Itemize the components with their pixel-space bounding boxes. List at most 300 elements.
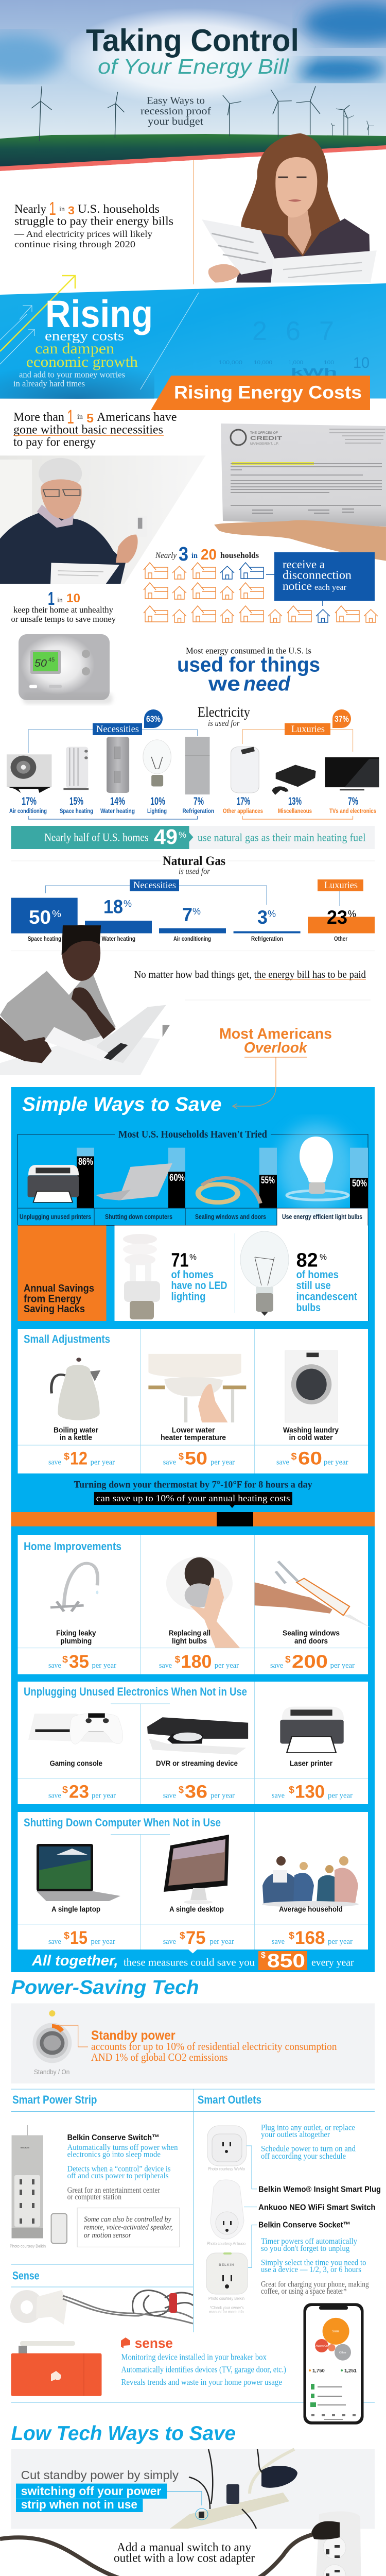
bar: windows 55 percent (259, 1148, 277, 1208)
annual savings box (17, 1226, 106, 1321)
chart: natural gas use (11, 853, 375, 951)
savings: 23, 36, 130: $ (289, 1785, 294, 1795)
meter readout: 100,000 (219, 360, 242, 366)
rising arrows (0, 276, 199, 389)
photo: woman reading bills (202, 133, 377, 282)
photo: older man at thermostat (0, 455, 205, 584)
stat: 82 percent (296, 1250, 357, 1314)
savings: 23, 36, 130: per year (210, 1792, 235, 1800)
savings: 35, 180, 200: per year (330, 1662, 355, 1670)
chart title: Most U.S. Households Haven't Tried (118, 1129, 267, 1140)
stat: 71 percent: lighting (171, 1291, 206, 1303)
callout: 49 percent natural gas: use natural gas as their main heating fuel (198, 832, 366, 844)
disconnection notice box: each year (314, 583, 347, 592)
air conditioning bar (159, 904, 226, 942)
title: Taking Control (86, 23, 299, 58)
Conserve Socket features: Great for charging your phone, making (261, 2280, 369, 2289)
heading: Simple Ways to Save (22, 1094, 222, 1115)
intro statistic: 1 in 3 households: — And electricity prices will likely (14, 229, 152, 239)
refrigeration bar: % (268, 909, 276, 919)
statistic: 1 in 5 Americans (13, 406, 177, 449)
savings: 12, 50, 60 (48, 1449, 348, 1469)
rising costs text: and add to your money worries (19, 370, 125, 380)
device: Belkin socket: BELKIN (219, 2263, 234, 2267)
panel: Sense monitor (10, 2269, 363, 2425)
salmon diagonal strip (0, 145, 386, 171)
panel: manual switch adapters (0, 2512, 361, 2576)
panel: shutting down computer (17, 1812, 368, 1950)
product copy: Automatically turns off power when (67, 2143, 178, 2152)
collection letter: THE OFFICES OF (250, 431, 278, 435)
intro statistic: 1 in 3 households: Nearly (14, 202, 46, 215)
Sense logo and copy: Monitoring device installed in your breaker box (121, 2352, 267, 2362)
labels for tried actions: Sealing windows and doors (195, 1213, 266, 1221)
LED and incandescent stats box (114, 1226, 368, 1321)
disconnection notice box: notice (283, 580, 312, 592)
intro statistic: 1 in 3 households: continue rising through 2020 (14, 239, 135, 249)
electricity heading (198, 704, 250, 728)
labels: in a kettle (60, 1434, 92, 1442)
heading: used for things we need: used for things (177, 654, 320, 676)
statistic: 1 in 5 Americans: in (77, 413, 83, 421)
savings: 23, 36, 130: save (272, 1792, 285, 1800)
space heating bar: Space heating (28, 935, 61, 942)
bar: windows 55 percent: 55% (261, 1175, 275, 1186)
electricity percentages: 14% (110, 795, 125, 807)
panel: home improvements: Home Improvements (24, 1540, 121, 1553)
nearly 3 in 20 heading: 3 (179, 544, 188, 565)
note box (77, 2208, 180, 2247)
heading: Rising: Rising (45, 293, 153, 335)
heading: used for things we need (177, 646, 320, 696)
stat: 71 percent: of homes (171, 1269, 214, 1281)
device: Belkin socket: *Check your owner's (210, 2306, 244, 2310)
necessities label (93, 709, 163, 735)
collection letter: MANAGEMENT, L.P. (250, 443, 279, 446)
icon: thermostat (19, 634, 113, 704)
photo credit: Photo courtesy Belkin (10, 2244, 46, 2249)
standby text: AND 1% of global CO2 emissions (91, 2051, 228, 2063)
product copy: Great for an entertainment center (67, 2186, 161, 2195)
Sense logo and copy: sense (135, 2335, 173, 2351)
savings: 15, 75, 168: $ (180, 1930, 185, 1941)
savings: 12, 50, 60: $ (64, 1451, 69, 1462)
savings: 23, 36, 130 (48, 1782, 353, 1802)
phone with Sense app: Solar (332, 2330, 339, 2333)
meter readout: 2 (252, 316, 267, 346)
clouds and deep sky (0, 3, 386, 106)
electricity percentages: 7% (348, 795, 358, 807)
labels: Gaming console (50, 1759, 102, 1768)
luxuries tag (318, 879, 363, 891)
intro statistic: 1 in 3 households (14, 198, 173, 249)
air conditioning bar: % (192, 906, 201, 917)
appliance illustrations (7, 737, 379, 795)
standby text: accounts for up to 10% of residential electricity consumption (91, 2040, 337, 2053)
air conditioning bar: Air conditioning (173, 935, 211, 942)
savings: 12, 50, 60: per year (210, 1459, 235, 1467)
savings: 12, 50, 60: save (276, 1459, 289, 1467)
orange banner (151, 376, 370, 410)
heading: power-saving tech: Power-Saving Tech (11, 1977, 199, 1998)
labels: Fixing leaky (56, 1629, 96, 1637)
bar: printers 86 percent (77, 1148, 94, 1208)
hand (214, 520, 386, 561)
electricity percentages: 13% (288, 795, 302, 807)
device: WeMo outlet: Photo courtesy WeMo (208, 2166, 245, 2171)
meter readout: 100 (324, 360, 334, 366)
savings: 35, 180, 200: save (159, 1662, 172, 1670)
icon: spiral bulb (123, 1234, 160, 1319)
savings: 15, 75, 168: $ (289, 1930, 294, 1941)
air conditioning bar: 7 (182, 904, 192, 925)
statistic: 1 in 10: 10 (66, 591, 80, 605)
photo: Sense device (11, 2341, 102, 2396)
stat: 82 percent: bulbs (296, 1302, 321, 1314)
dark corner (0, 355, 154, 399)
labels (56, 1629, 340, 1646)
necessities tag: Necessities (133, 880, 176, 891)
product copy: off and cuts power to peripherals (67, 2172, 169, 2180)
heading: low tech ways to save: Low Tech Ways to Save (11, 2422, 236, 2445)
labels (51, 1906, 343, 1914)
panel: small adjustments: Small Adjustments (24, 1332, 110, 1346)
refrigeration bar: Refrigeration (251, 935, 283, 942)
savings: 15, 75, 168: save (272, 1938, 285, 1946)
phone with Sense app: Always On (315, 2345, 328, 2348)
rising costs text (13, 329, 138, 388)
electricity labels: Air conditioning (9, 807, 47, 815)
heading: most Americans overlook (185, 1000, 371, 1057)
product names (258, 2185, 381, 2230)
icon: washing machine (285, 1351, 338, 1422)
tech grid lines (11, 2089, 375, 2402)
WeMo features: your outlets altogether (261, 2130, 330, 2139)
icon: laptop (96, 1163, 172, 1200)
bar: computers 60 percent (168, 1148, 185, 1208)
annual savings box: from Energy (24, 1293, 82, 1304)
refrigeration bar (234, 907, 301, 942)
frame lines (17, 1134, 368, 1321)
savings: 35, 180, 200: $ (62, 1654, 68, 1665)
meter readout (219, 316, 370, 378)
statistic: 1 in 5 Americans: 5 (86, 412, 94, 426)
savings: 35, 180, 200: save (270, 1662, 283, 1670)
stat: 82 percent: still use (296, 1280, 331, 1292)
icon: incandescent bulb (240, 1231, 289, 1316)
icon: weather strip roll (198, 1178, 260, 1204)
panel: smart outlets (198, 2093, 381, 2314)
statistic: 1 in 10 (11, 588, 116, 624)
heading: most Americans overlook: Overlook (244, 1040, 308, 1056)
electricity labels: TVs and electronics (329, 807, 376, 815)
bar: bulbs 50 percent (350, 1148, 368, 1208)
device: WeMo outlet (207, 2126, 246, 2171)
text: add a manual switch (114, 2541, 255, 2565)
bar: bulbs 50 percent: 50% (352, 1178, 367, 1189)
statistic: 1 in 5 Americans: 1 (67, 406, 74, 428)
rising costs text: can dampen (35, 340, 114, 357)
savings: 15, 75, 168: save (163, 1938, 176, 1946)
water heating bar: % (124, 899, 132, 909)
WeMo features: off according your schedule (261, 2152, 346, 2161)
icon: caulking gun (255, 1562, 371, 1628)
highlighted text: switching off your power (21, 2484, 161, 2498)
savings: 15, 75, 168: per year (210, 1938, 234, 1946)
statistic: 1 in 10: or unsafe temps to save money (11, 614, 116, 624)
photo: Belkin power strip: BELKIN (21, 2146, 29, 2149)
savings: 15, 75, 168: 75 (186, 1928, 206, 1948)
rising costs text: in already hard times (13, 379, 85, 388)
Sense logo and copy: Reveals trends and waste in your home power usage (121, 2377, 282, 2387)
Sense logo and copy: Automatically identifies devices (TV, garage door, etc.) (121, 2365, 286, 2375)
labels: Replacing all (169, 1629, 210, 1637)
tagline: recession proof (141, 106, 211, 117)
nearly 3 in 20 heading: in (191, 552, 198, 560)
space heating bar: % (52, 909, 61, 919)
labels: plumbing (60, 1637, 92, 1646)
standby text (91, 2028, 337, 2063)
note box: or motion sensor (84, 2231, 131, 2240)
labels for tried actions: Shutting down computers (105, 1213, 172, 1221)
natural gas heading (11, 853, 375, 876)
intro statistic: 1 in 3 households: struggle to pay their energy bills (14, 214, 173, 228)
meter readout: 6 (286, 316, 301, 346)
statistic: 1 in 5 Americans: More than (13, 411, 64, 424)
bar: printers 86 percent: 86% (78, 1157, 93, 1167)
Conserve Socket features: Timer powers off automatically (261, 2237, 357, 2246)
savings: 15, 75, 168: $ (64, 1930, 69, 1941)
panel: shutting down computer: Shutting Down Computer When Not in Use (24, 1816, 221, 1829)
nearly 3 in 20 heading: households (220, 551, 259, 560)
highlighted text (16, 2484, 167, 2512)
intro statistic: 1 in 3 households: in (59, 206, 65, 213)
savings: 12, 50, 60: $ (291, 1451, 296, 1462)
wind turbines (31, 86, 374, 141)
panel: standby power (11, 2003, 375, 2083)
chart: most households have not tried (17, 1123, 368, 1321)
meter readout: 10,000 (254, 360, 272, 366)
icon: laptop (37, 1844, 120, 1901)
savings: 12, 50, 60: $ (179, 1451, 184, 1462)
icon: leaky faucet (50, 1563, 98, 1612)
electricity percentages: 10% (150, 795, 165, 807)
heading: used for things we need: need (243, 673, 291, 696)
product copy: Belkin Conserve Switch™ (67, 2133, 160, 2142)
photo: current clamp sensors (10, 2290, 193, 2325)
Sense logo and copy (121, 2335, 286, 2387)
subtitle: of Your Energy Bill (98, 55, 290, 78)
total savings line (31, 1950, 354, 1972)
labels: Laser printer (290, 1759, 332, 1768)
total savings line: All together, (31, 1953, 118, 1969)
disconnection notice box: disconnection (283, 569, 352, 582)
highlighted text: strip when not in use (21, 2498, 137, 2511)
electricity labels (9, 807, 376, 815)
savings: 35, 180, 200: 35 (69, 1652, 89, 1672)
water heating bar: Water heating (102, 935, 135, 942)
phone with Sense app (304, 2303, 363, 2425)
electricity percentages: 15% (69, 795, 83, 807)
savings: 35, 180, 200: 200 (292, 1652, 328, 1672)
stat: 82 percent: % (320, 1253, 327, 1262)
total savings line: $ (261, 1951, 266, 1960)
Conserve Socket features: Simply select the time you need to (261, 2259, 366, 2267)
product names: Belkin Conserve Socket™ (258, 2221, 350, 2230)
meter readout: kWh (291, 367, 337, 378)
photo: collection letter held on a hand (214, 423, 386, 561)
stat: 71 percent: 71 (171, 1250, 188, 1272)
savings: 15, 75, 168: 15 (70, 1928, 87, 1948)
total savings line: these measures could save you (124, 1956, 255, 1969)
labels for tried actions: Unplugging unused printers (20, 1213, 91, 1221)
phone with Sense app: Other (339, 2351, 346, 2354)
savings: 15, 75, 168: save (48, 1938, 61, 1946)
blue panel background (11, 1087, 375, 1972)
electricity labels: Refrigeration (182, 807, 214, 815)
savings: 15, 75, 168: per year (328, 1938, 353, 1946)
electricity labels: Miscellaneous (278, 807, 312, 815)
savings: 35, 180, 200: $ (175, 1654, 180, 1665)
electricity percentages: 17% (237, 795, 250, 807)
statistic: 1 in 10: keep their home at unhealthy (13, 605, 113, 615)
labels: Washing laundry (283, 1426, 339, 1434)
intro statistic: 1 in 3 households: 1 (49, 198, 56, 219)
icon: standby button: Standby / On (34, 2068, 69, 2076)
total savings line: every year (311, 1956, 354, 1969)
white slant below hero (0, 149, 386, 299)
icon: hand replacing bulb (166, 1556, 240, 1648)
stat: 71 percent: have no LED (171, 1280, 227, 1292)
disconnection notice box (266, 552, 375, 606)
other bar: 23 (327, 907, 347, 928)
WeMo features: Schedule power to turn on and (261, 2145, 356, 2154)
rising costs text: energy costs (45, 329, 124, 344)
savings: 23, 36, 130: per year (92, 1792, 116, 1800)
icon: standby button (32, 2010, 88, 2076)
photo: power strip with plugs (167, 2449, 297, 2529)
callout: 49 percent natural gas (11, 825, 375, 849)
intro statistic: 1 in 3 households: U.S. households (78, 202, 160, 215)
device: Zapman adapter (311, 2512, 361, 2576)
heading: used for things we need: Most energy consumed in the U.S. is (186, 646, 311, 656)
refrigeration bar: 3 (257, 907, 268, 928)
stat: 82 percent: incandescent (296, 1291, 357, 1303)
other bar: Other (334, 935, 347, 942)
disconnection notice box: receive a (283, 558, 325, 571)
chart: electricity use (7, 704, 379, 819)
callout: thermostat tip (74, 1480, 312, 1508)
standby text: Standby power (91, 2028, 176, 2043)
icon: laser printer (280, 1707, 344, 1753)
savings: 15, 75, 168: per year (91, 1938, 115, 1946)
heading: Sense (12, 2269, 40, 2282)
heading: used for things we need: we (208, 673, 240, 696)
meter readout: 1,000 (288, 360, 303, 366)
connector lines (244, 2146, 257, 2268)
photo: family with devices (262, 1856, 359, 1907)
note box: remote, voice-activated speaker, (84, 2224, 173, 2232)
tagline: Easy Ways to (147, 95, 205, 106)
labels: and doors (294, 1637, 328, 1646)
statistic: 1 in 10: in (57, 597, 63, 604)
savings: 35, 180, 200: per year (215, 1662, 239, 1670)
annual savings box: Annual Savings (24, 1283, 94, 1294)
Conserve Socket features: coffee, or using a space heater* (261, 2287, 347, 2296)
orange savings bar (11, 1512, 375, 1527)
icon: kettle (51, 1358, 100, 1420)
electricity percentages: 7% (194, 795, 204, 807)
WeMo features (261, 2124, 356, 2161)
text: cut standby power: Cut standby power by simply (21, 2468, 179, 2482)
water heating bar: 18 (103, 896, 123, 917)
nearly 3 in 20 heading (155, 544, 259, 565)
text: add a manual switch: Add a manual switch to any (117, 2541, 251, 2554)
savings: 23, 36, 130: save (48, 1792, 61, 1800)
icon: gaming console (28, 1713, 123, 1744)
sky (0, 0, 386, 155)
stat: 71 percent (171, 1250, 227, 1303)
statistic: 1 in 5 Americans: Americans have (97, 411, 177, 424)
labels: DVR or streaming device (156, 1759, 238, 1768)
electricity percentages (22, 795, 358, 807)
savings: 12, 50, 60: per year (324, 1459, 348, 1467)
panel: home improvements (17, 1535, 371, 1674)
labels (54, 1426, 339, 1442)
collection letter (221, 423, 386, 527)
note box: Some can also be controlled by (84, 2215, 171, 2224)
savings: 35, 180, 200 (48, 1652, 355, 1672)
icon: desktop computer (164, 1835, 229, 1904)
space heating bar (11, 898, 78, 942)
luxuries tag: Luxuries (324, 880, 358, 891)
bulb glow (277, 1123, 355, 1211)
savings: 23, 36, 130: $ (179, 1785, 184, 1795)
labels: light bulbs (172, 1637, 207, 1646)
luxuries label (285, 709, 351, 735)
labels: A single laptop (51, 1906, 100, 1914)
savings: 35, 180, 200: save (48, 1662, 61, 1670)
brackets (45, 886, 340, 906)
labels for tried actions (20, 1213, 362, 1221)
orange banner: Rising Energy Costs (174, 382, 362, 402)
labels: Sealing windows (283, 1629, 340, 1637)
heading: Smart Power Strip (12, 2093, 97, 2106)
brackets (28, 730, 353, 819)
text: add a manual switch: outlet with a low cost adapter (114, 2552, 255, 2565)
labels: A single desktop (169, 1906, 224, 1914)
callout: 49 percent natural gas: % (179, 830, 186, 840)
space heating bar: 50 (29, 907, 51, 928)
device: Belkin socket: Photo courtesy Belkin (208, 2296, 244, 2301)
phone with Sense app: 1,750 (312, 2368, 325, 2374)
collection letter: CREDIT (250, 435, 282, 442)
nearly 3 in 20 heading: 20 (201, 547, 217, 563)
labels: in cold water (289, 1434, 333, 1442)
ground (0, 134, 386, 168)
divider line orange (192, 160, 194, 284)
natural gas heading: Natural Gas (163, 854, 225, 868)
labels: Lower water (172, 1426, 215, 1434)
electricity labels: Water heating (100, 807, 135, 815)
icon: thermostat: 45 (48, 657, 55, 663)
icon: DVR (147, 1717, 248, 1755)
white label cell (277, 1209, 367, 1226)
tagline: your budget (148, 116, 203, 127)
electricity percentages: 17% (22, 795, 37, 807)
savings: 12, 50, 60: per year (91, 1459, 115, 1467)
electricity labels: Lighting (147, 807, 167, 815)
